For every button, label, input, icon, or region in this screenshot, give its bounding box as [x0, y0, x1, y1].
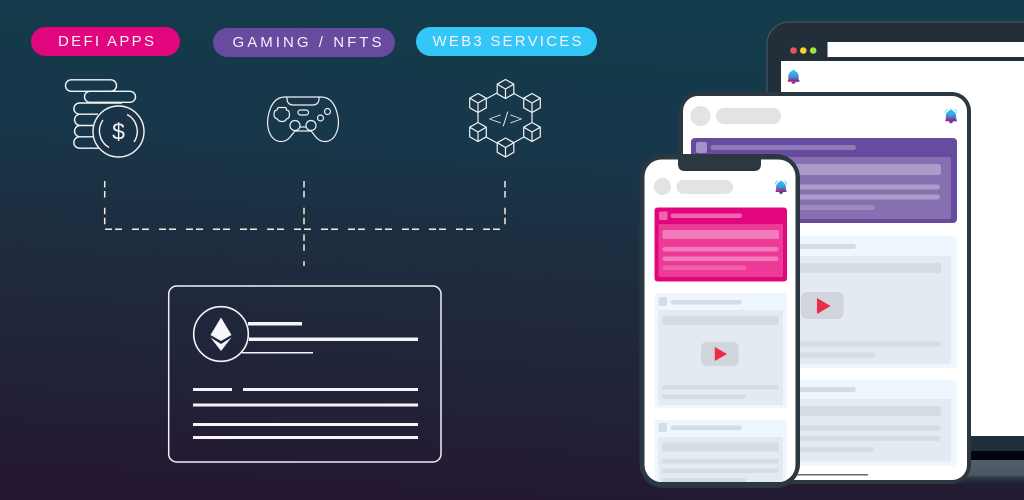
tablet purple card [691, 138, 957, 223]
address bar [828, 42, 1024, 57]
tablet [679, 92, 971, 484]
category pill: DeFi apps: DEFI APPS [58, 33, 154, 50]
ethereum logo [194, 307, 248, 361]
icon: coin stack: $ [112, 118, 125, 144]
dashed connector lines [105, 181, 505, 266]
phone notch [678, 159, 761, 171]
tablet home indicator [790, 474, 868, 476]
phone text card [654, 420, 787, 482]
tablet video card [800, 236, 957, 368]
category pill: Gaming / NFTs: GAMING / NFTS [232, 34, 382, 51]
category pill: Web3 services: WEB3 SERVICES [432, 33, 582, 50]
phone header [654, 178, 787, 195]
icon: code block network [470, 80, 540, 157]
card text lines [193, 322, 418, 439]
category pill: DeFi apps [31, 27, 180, 56]
icon: code block network: </> [487, 108, 524, 130]
window dots [790, 47, 816, 54]
tablet header [690, 106, 957, 126]
laptop [767, 22, 1024, 485]
laptop base [960, 436, 1024, 485]
icon: game controller [268, 97, 338, 142]
laptop screen [781, 61, 1024, 436]
laptop bell [788, 70, 799, 84]
icon: coin stack [66, 80, 144, 157]
phone [640, 154, 800, 500]
phone video card [654, 293, 787, 408]
category pill: Gaming / NFTs [213, 28, 395, 57]
phone pink card [654, 208, 787, 282]
smart contract card [169, 286, 441, 462]
tablet text card [800, 380, 957, 466]
category pill: Web3 services [416, 27, 597, 56]
